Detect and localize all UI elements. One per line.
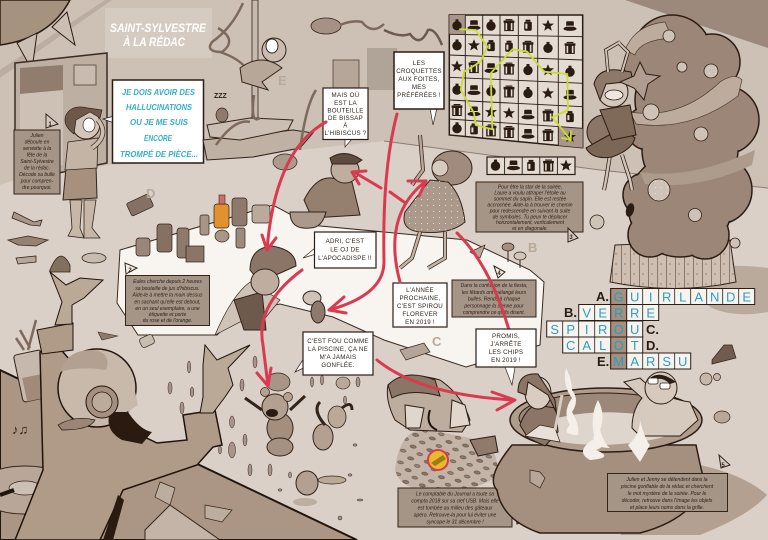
arrow: croquettes to hidden man [329, 114, 397, 313]
caption 3: Laure a voulu attraper l'étoile au [494, 190, 566, 196]
crossword row A [611, 288, 755, 304]
cocktail glass and notes [12, 320, 51, 437]
bubble: C'est fou: LA PISCINE, ÇA NE [308, 346, 368, 353]
cocktail glass and notes: ♪♫ [12, 422, 28, 437]
caption 1: Julien [29, 133, 44, 139]
caption 4: les fêtards ont mélangé leurs [462, 290, 527, 296]
caption 3: sommet du sapin. Elle est restée [494, 196, 566, 202]
crossword row D: T [631, 338, 639, 353]
caption 1: déboule en [25, 140, 50, 146]
caption 1: de la rédac. [24, 166, 50, 172]
stage and pole with Marsupilami [203, 0, 316, 160]
speech bubble: Julien in blue: OU JE ME SUIS [130, 117, 188, 127]
characters: party mice [245, 373, 352, 506]
caption 2: en un seul exemplaire, a une [135, 306, 200, 312]
caption 2: Aide-le à mettre la main dessus [131, 293, 203, 299]
caption 1: pour compren- [20, 178, 54, 184]
USB key in red circle [428, 450, 448, 470]
number tag 2: 2 [128, 268, 132, 274]
arrow: adri to mice [257, 270, 302, 386]
character: Eules with bowl [290, 153, 362, 228]
bubble: Mais où est la bouteille: EST LA [334, 100, 357, 107]
Christmas tree [590, 15, 759, 288]
bubble: Les croquettes: LES [413, 60, 425, 67]
bubble: Mais où est la bouteille [323, 88, 368, 147]
number tag 2 [125, 263, 137, 274]
arrow: Laure to promis [457, 233, 509, 330]
crossword row B: E [598, 306, 607, 320]
caption 3: pour redescendre en suivant la suite [489, 208, 571, 214]
crossword row B: R [630, 306, 639, 320]
crossword row E: A [630, 354, 639, 369]
magazine on floor [400, 343, 430, 360]
bubble: L'année prochaine: FLOREVER [402, 311, 438, 318]
crossword clue letters: E. [597, 354, 609, 369]
arrow: next year to Laure [390, 181, 426, 282]
crossword row C: S [550, 322, 559, 337]
crossword row A: E [742, 290, 751, 304]
bubble: Promis: J'ARRÊTE [490, 340, 522, 348]
crossword [547, 288, 755, 369]
crossword row A: L [679, 290, 686, 304]
caption 5: piscine gonflable de la rédac et cherchent [620, 484, 714, 490]
character: Julien in towel [63, 107, 103, 238]
crossword row D: L [599, 338, 606, 353]
arrow: c'est fou to pool [377, 360, 515, 410]
bottles on the table [126, 186, 270, 262]
caption 3: Pour être la star de la soirée, [498, 184, 562, 190]
number tag 6 [515, 510, 526, 524]
bubble: L'année prochaine [393, 283, 447, 327]
poster [333, 48, 397, 90]
crossword row C: U [630, 322, 639, 337]
steam [565, 368, 650, 462]
wine glasses and shoes: B [528, 240, 537, 255]
speech bubble: Julien in blue: TROMPÉ DE PIÈCE... [120, 149, 198, 159]
number tag 5 [719, 455, 730, 469]
number tag 5: 5 [721, 463, 725, 469]
caption 3: et en diagonale. [512, 226, 548, 232]
bubble: Mais où est la bouteille: À [343, 122, 348, 130]
bottles on the table: D [146, 186, 155, 201]
character: Laure dancing [400, 135, 472, 268]
bubble: C'est fou: GONFLÉE. [321, 362, 355, 369]
caption 2: étiquette et porte [149, 312, 186, 318]
crossword row C: O [614, 322, 624, 337]
crossword row B [579, 304, 659, 320]
wine glasses and shoes [432, 240, 537, 349]
bubble: Adri oj apocadispe [303, 232, 376, 268]
number tag 4 [494, 266, 505, 278]
caption 3: de symboles. Tu peux te déplacer [493, 214, 568, 220]
number tag 3 [568, 228, 578, 242]
wine glasses and shoes: C [432, 334, 442, 349]
bubble: Mais où est la bouteille: BOUTEILLE [327, 108, 364, 115]
bubble: Les croquettes: AUX FOITES, [398, 76, 440, 83]
caption 6: apéro. Retrouve-la pour lui éviter une [414, 512, 496, 518]
crossword row D [563, 337, 643, 353]
floor objects left [8, 212, 155, 348]
caption 6: syncope le 31 décembre ! [426, 520, 484, 526]
crossword row E [611, 353, 691, 369]
bubble: Promis: PROMIS, [492, 333, 520, 340]
caption 5 [608, 474, 728, 512]
crossword row E: M [613, 354, 624, 369]
speech bubble: Julien in blue: HALLUCINATIONS [126, 102, 192, 112]
caption 1: Saint-Sylvestre [20, 159, 54, 165]
character: hat man at the table [215, 246, 296, 335]
crossword row A: N [710, 290, 719, 304]
crossword clue letters: D. [646, 338, 659, 353]
caption 4: bulles. Rends à chaque [468, 297, 520, 303]
crossword clue letters: C. [646, 322, 659, 337]
number tag 1: 1 [48, 122, 52, 128]
bubble: Les croquettes: CROQUETTES [396, 68, 442, 75]
speech bubble: Julien in blue: JE DOIS AVOIR DES [122, 87, 195, 97]
comptable and cookies [387, 375, 500, 491]
stage and pole with Marsupilami: E [278, 73, 287, 88]
symbol sequence [487, 157, 575, 174]
number tag 6: 6 [517, 518, 521, 524]
bubble: Les croquettes: PRÉFÉRÉES ! [397, 92, 441, 99]
caption 1: dre pourquoi. [22, 185, 52, 191]
bubble: Adri oj apocadispe: L'APOCADISPE !! [318, 255, 372, 262]
number tag 1 [46, 114, 58, 128]
caption 1: Décode sa bulle [19, 172, 55, 178]
floor stain under tree [684, 266, 768, 314]
crossword clue letters [564, 289, 659, 369]
bubble: L'année prochaine: PROCHAINE, [399, 295, 441, 302]
character: Julien in the pool [624, 372, 698, 436]
caption 5: et place leurs noms dans la grille. [630, 505, 704, 511]
crossword row D: O [614, 338, 624, 353]
turntable [0, 466, 232, 540]
caption 4: personnage la sienne pour [463, 303, 524, 309]
bubble: L'année prochaine: EN 2019 ! [405, 319, 435, 326]
caption 5: Julien et Jenny se détendent dans la [625, 477, 708, 483]
caption 3: accrochée. Aide-la à trouver le chemin [487, 202, 573, 208]
speech bubble: Julien in blue: ENCORE [144, 133, 172, 143]
crossword row E: S [662, 354, 671, 369]
caption 4: Dans la confusion de la fiesta, [461, 283, 527, 289]
crossword row A: A [694, 290, 703, 304]
small sleeping marsu [214, 93, 228, 122]
character: man hidden under cloth [303, 291, 325, 323]
crossword row C: I [585, 322, 589, 337]
caption 6 [398, 488, 512, 527]
crossword row C [547, 321, 643, 337]
number tag 4: 4 [497, 271, 501, 277]
inflatable pool [493, 388, 767, 535]
banner garland top-left [0, 0, 75, 70]
caption 2: en sachant qu'elle est debout, [134, 299, 201, 305]
caption 2: sa bouteille de jus d'hibiscus. [135, 286, 200, 292]
crossword row A: D [726, 290, 735, 304]
crossword row A: G [614, 290, 624, 304]
bubble: Promis: LES CHIPS [489, 349, 523, 356]
bubble: Promis: EN 2019 ! [491, 357, 521, 364]
caption 2: Eules cherche depuis 2 heures [133, 279, 202, 285]
caption 4 [452, 280, 536, 317]
DJ desk [0, 370, 357, 540]
crossword row D: A [582, 338, 591, 353]
crossword row B: E [646, 306, 655, 320]
crossword row A: I [649, 290, 653, 304]
caption 2 [126, 276, 210, 326]
caption 3: horizontalement, verticalement [496, 220, 565, 226]
crossword clue letters: B. [564, 305, 577, 320]
bubble: Les croquettes [394, 52, 444, 125]
title [110, 21, 207, 49]
caption 5: le mot mystère de la soirée. Pour le [628, 491, 707, 497]
bubble: Mais où est la bouteille: L'HIBISCUS ? [324, 130, 367, 137]
bubble: L'année prochaine: C'EST SPIROU [397, 303, 443, 310]
caption 4: comprendre ce qu'ils disent. [463, 310, 525, 316]
caption 5: décoder, retrouve dans l'image les objets [622, 498, 713, 504]
bubble: C'est fou: C'EST FOU COMME [307, 338, 369, 345]
bubble: Adri oj apocadispe: ADRI, C'EST [326, 238, 364, 245]
speech bubble: Julien in blue [103, 80, 204, 163]
bubble: L'année prochaine: L'ANNÉE [406, 287, 434, 294]
bubble: C'est fou: M'A JAMAIS [320, 354, 356, 361]
caption 1: fête de la [27, 152, 48, 158]
crossword row D: C [566, 338, 575, 353]
crossword row C: R [598, 322, 607, 337]
small sleeping marsu: ZZZ [214, 93, 228, 100]
crossword row B: R [614, 306, 623, 320]
bubble: Mais où est la bouteille: DE BISSAP [328, 115, 363, 122]
title: À LA RÉDAC [122, 34, 185, 49]
caption 2: du rose et de l'orange. [143, 318, 192, 324]
crossword row A: R [662, 290, 671, 304]
symbol grid [449, 15, 583, 148]
arrow: bissap bubble to hat man [262, 122, 326, 250]
crossword row B: V [582, 306, 591, 320]
caption 1 [14, 130, 60, 194]
crossword row C: P [566, 322, 575, 337]
bubble: Promis [476, 329, 536, 385]
number tag 3: 3 [569, 235, 573, 241]
character: Laure on the tree [586, 42, 660, 190]
confetti [168, 356, 363, 520]
arrow: to Eules [352, 171, 381, 188]
character: Jenny in the pool [518, 374, 562, 446]
crossword row A: U [630, 290, 639, 304]
caption 3 [476, 182, 583, 232]
door [15, 53, 107, 182]
caption 6: compta 2018 sur sa clef USB. Mais elle [411, 498, 499, 504]
flying marsu and tail top [311, 18, 442, 45]
bubble: C'est fou [295, 332, 373, 375]
caption 1: serviette à la [23, 146, 51, 152]
crossword row E: U [678, 354, 687, 369]
marsu under the stage [273, 154, 297, 170]
bubble: Adri oj apocadispe: LE OJ DE [330, 246, 360, 254]
caption 6: est tombée au milieu des gâteaux [418, 506, 493, 512]
caption 6: Le comptable du Journal a toute sa [416, 492, 494, 498]
bubble: Les croquettes: MES [412, 84, 426, 91]
crossword clue letters: A. [596, 289, 609, 304]
crossword row E: R [646, 354, 655, 369]
title: SAINT-SYLVESTRE [110, 21, 207, 35]
character: DJ [15, 272, 250, 540]
maze solution path [460, 29, 571, 140]
red arrows [257, 114, 515, 410]
floor objects right [700, 345, 736, 423]
bubble: Mais où est la bouteille: MAIS OÙ [332, 92, 359, 99]
tablecloth [117, 205, 544, 367]
